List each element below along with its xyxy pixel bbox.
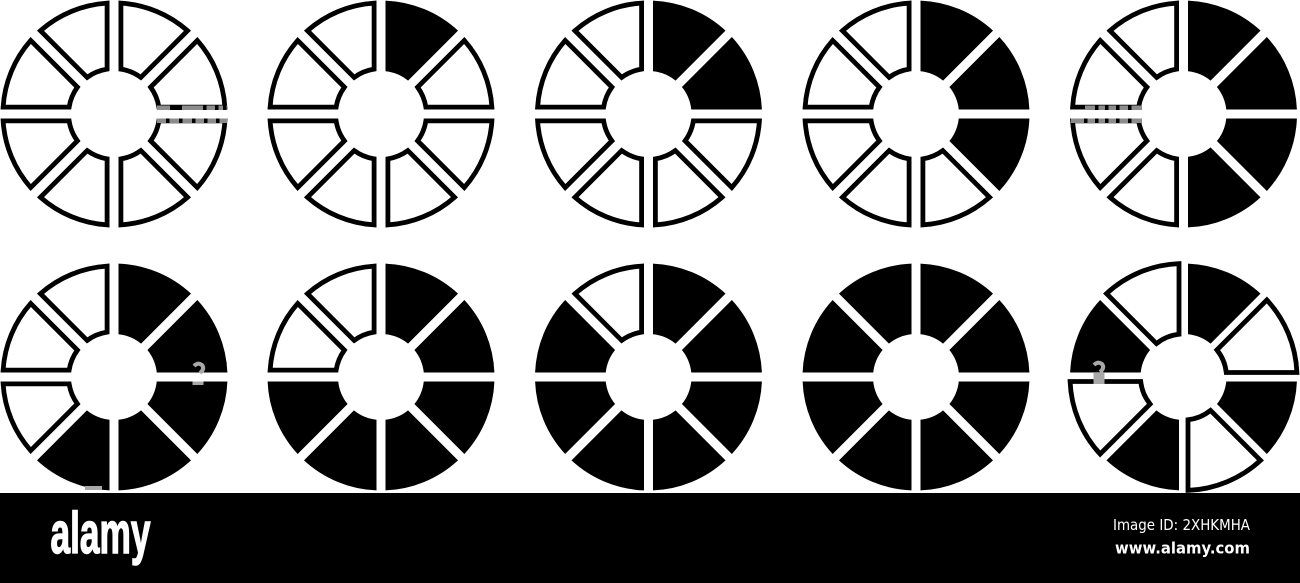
watermark residue on sixth donut <box>85 364 203 488</box>
watermark residue on fifth donut <box>1071 106 1142 123</box>
donut alternating filled segments <box>1049 242 1300 512</box>
watermark residue on first donut <box>157 106 227 123</box>
logo text: alamy <box>50 501 150 566</box>
donut 4 of 8 filled <box>1053 0 1300 249</box>
donut 2 of 8 filled <box>518 0 783 244</box>
donut 1 of 8 filled <box>251 0 511 244</box>
donut 8 of 8 filled <box>781 242 1051 512</box>
donut 3 of 8 filled <box>786 0 1051 244</box>
donut 6 of 8 filled <box>246 247 516 512</box>
donut 5 of 8 filled <box>0 247 249 512</box>
website text: www.alamy.com <box>1115 538 1250 558</box>
donut 7 of 8 filled <box>514 247 783 512</box>
donut 0 of 8 filled <box>0 0 244 244</box>
image id text: Image ID: 2XHKMHA <box>1113 516 1251 534</box>
footer bar <box>0 493 1300 583</box>
watermark residue on last donut <box>1094 363 1103 384</box>
